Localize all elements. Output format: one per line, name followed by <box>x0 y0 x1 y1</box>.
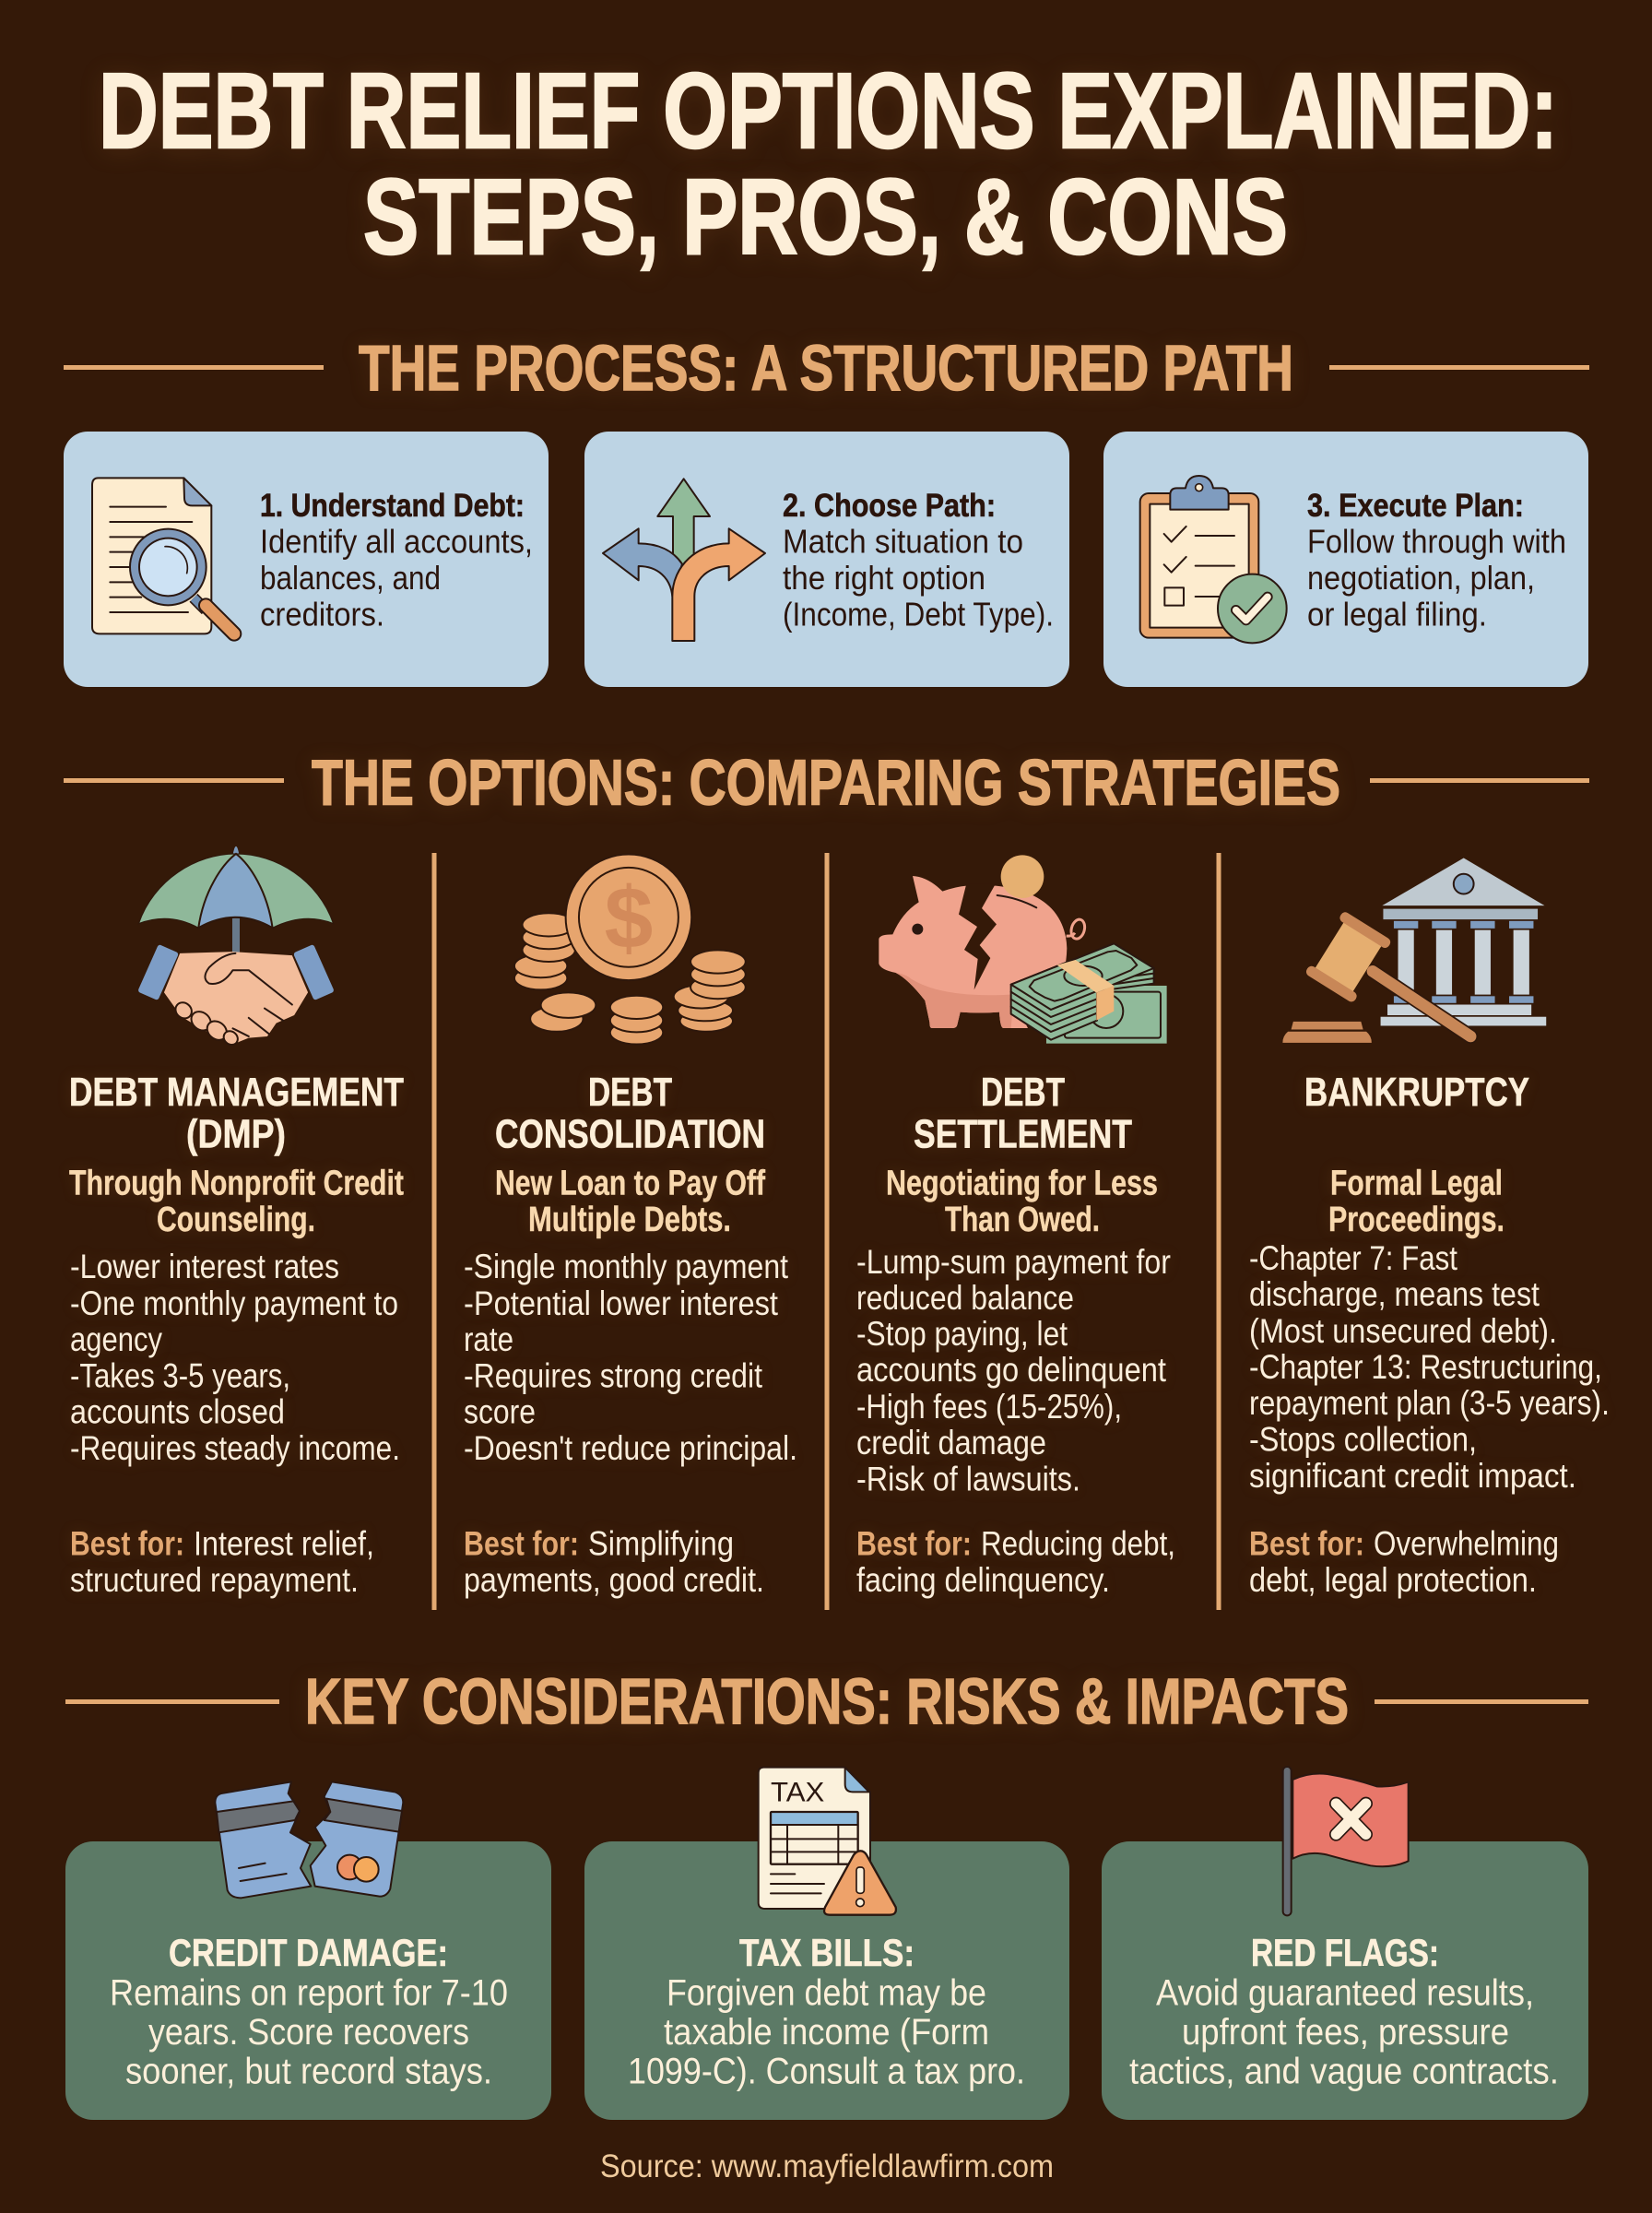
debt management best for: Interest relief, <box>194 1525 374 1562</box>
debt settlement title: SETTLEMENT <box>914 1112 1132 1156</box>
bankruptcy subtitle: Formal Legal <box>1330 1164 1503 1202</box>
debt management bullets: agency <box>70 1320 162 1358</box>
icon: broken credit card <box>215 1781 403 1898</box>
debt settlement bullets: reduced balance <box>856 1279 1074 1317</box>
debt management title: (DMP) <box>186 1112 286 1156</box>
icon: red flag <box>1283 1767 1409 1915</box>
step 3 text: negotiation, plan, <box>1307 559 1535 597</box>
tax bills text: 1099-C). Consult a tax pro. <box>628 2051 1025 2091</box>
debt consolidation bullets: -Doesn't reduce principal. <box>464 1429 797 1467</box>
debt settlement bullets: credit damage <box>856 1424 1046 1462</box>
step 2 text: the right option <box>783 559 985 597</box>
debt settlement bullets <box>856 1243 1171 1497</box>
debt settlement best for <box>856 1525 1175 1599</box>
red flags text: Avoid guaranteed results, <box>1156 1973 1534 2014</box>
panel: credit damage <box>65 1781 551 2120</box>
debt consolidation bullets <box>464 1248 797 1467</box>
panel: debt management <box>69 846 404 1599</box>
debt management bullets: -Requires steady income. <box>70 1429 400 1467</box>
bankruptcy bullets: (Most unsecured debt). <box>1249 1312 1557 1350</box>
debt management bullets: -Takes 3-5 years, <box>70 1357 290 1394</box>
red flags text: tactics, and vague contracts. <box>1129 2051 1559 2091</box>
step 1 text: creditors. <box>260 596 384 633</box>
bankruptcy bullets: discharge, means test <box>1249 1275 1540 1313</box>
debt consolidation best for: Best for: <box>464 1525 579 1562</box>
panel: bankruptcy <box>1249 858 1610 1599</box>
debt consolidation best for: payments, good credit. <box>464 1561 764 1599</box>
debt settlement subtitle <box>886 1164 1158 1239</box>
step 3 text: 3. Execute Plan: <box>1307 488 1524 524</box>
bankruptcy bullets: -Chapter 13: Restructuring, <box>1249 1348 1602 1386</box>
credit damage text: CREDIT DAMAGE: <box>169 1931 448 1974</box>
icon: broken piggy bank with cash <box>879 855 1167 1044</box>
debt consolidation subtitle <box>495 1164 765 1239</box>
debt consolidation subtitle: New Loan to Pay Off <box>495 1164 765 1202</box>
step 1 text: balances, and <box>260 559 441 597</box>
step 2 text: 2. Choose Path: <box>783 488 996 524</box>
debt settlement title: DEBT <box>981 1070 1065 1115</box>
debt consolidation bullets: -Requires strong credit <box>464 1357 763 1394</box>
debt consolidation title: DEBT <box>588 1070 672 1115</box>
tax bills text: taxable income (Form <box>664 2012 989 2053</box>
step 3 text: Follow through with <box>1307 522 1566 561</box>
debt management subtitle <box>69 1164 404 1239</box>
column dividers <box>431 853 1221 1610</box>
icon: coin stacks <box>514 854 746 1045</box>
step 3 text <box>1307 488 1566 633</box>
panel: debt settlement <box>856 855 1175 1599</box>
title <box>99 51 1558 277</box>
debt management title: DEBT MANAGEMENT <box>69 1070 404 1115</box>
icon: clipboard checklist <box>1140 476 1287 643</box>
red flags text: upfront fees, pressure <box>1182 2012 1509 2053</box>
debt consolidation bullets: -Single monthly payment <box>464 1248 789 1285</box>
debt settlement title <box>914 1070 1132 1156</box>
bankruptcy title: BANKRUPTCY <box>1304 1070 1529 1115</box>
debt management bullets: -One monthly payment to <box>70 1284 398 1322</box>
bankruptcy bullets <box>1249 1239 1610 1495</box>
debt consolidation bullets: score <box>464 1392 536 1431</box>
panel: step 3 execute plan <box>1103 432 1588 687</box>
bankruptcy bullets: -Stops collection, <box>1249 1420 1477 1459</box>
debt management bullets <box>70 1248 400 1467</box>
credit damage text: years. Score recovers <box>148 2012 469 2053</box>
bankruptcy subtitle: Proceedings. <box>1328 1201 1504 1239</box>
debt consolidation best for <box>464 1525 764 1599</box>
bankruptcy best for: Overwhelming <box>1374 1525 1559 1562</box>
credit damage text <box>110 1931 508 2091</box>
panel: step 2 choose path <box>584 432 1069 687</box>
debt settlement bullets: -Lump-sum payment for <box>856 1243 1171 1281</box>
step 1 text: 1. Understand Debt: <box>260 488 525 524</box>
icon: document with magnifier <box>92 478 234 633</box>
step 1 text: Identify all accounts, <box>260 522 533 561</box>
debt settlement bullets: -Risk of lawsuits. <box>856 1461 1080 1497</box>
debt consolidation subtitle: Multiple Debts. <box>528 1201 731 1239</box>
credit damage text: Remains on report for 7-10 <box>110 1973 508 2014</box>
step 2 text <box>783 488 1054 633</box>
debt management title <box>69 1070 404 1156</box>
debt consolidation title <box>495 1070 765 1156</box>
panel: red flags <box>1102 1767 1588 2120</box>
step 1 text <box>260 488 533 633</box>
debt management best for <box>70 1525 374 1599</box>
debt management best for: Best for: <box>70 1525 184 1562</box>
debt settlement best for: Best for: <box>856 1525 972 1562</box>
step 2 text: (Income, Debt Type). <box>783 596 1054 633</box>
title: STEPS, PROS, & CONS <box>363 157 1288 277</box>
section heading: key considerations: KEY CONSIDERATIONS: RISKS & IMPACTS <box>305 1665 1349 1737</box>
bankruptcy subtitle <box>1328 1164 1504 1239</box>
section heading: the process: THE PROCESS: A STRUCTURED PATH <box>359 332 1293 404</box>
tax bills text: TAX BILLS: <box>739 1931 914 1974</box>
step 3 text: or legal filing. <box>1307 596 1487 633</box>
icon: courthouse and gavel <box>1282 858 1546 1043</box>
debt management subtitle: Through Nonprofit Credit <box>69 1164 404 1202</box>
icon: umbrella over handshake <box>137 846 335 1047</box>
icon: coin stacks: $ <box>605 870 653 967</box>
panel: tax bills <box>584 1768 1069 2120</box>
debt settlement subtitle: Than Owed. <box>945 1201 1100 1239</box>
debt settlement subtitle: Negotiating for Less <box>886 1164 1158 1202</box>
debt settlement bullets: -Stop paying, let <box>856 1315 1068 1353</box>
tax bills text <box>628 1931 1025 2091</box>
red flags text: RED FLAGS: <box>1251 1931 1439 1974</box>
debt consolidation bullets: -Potential lower interest <box>464 1284 779 1322</box>
debt settlement bullets: accounts go delinquent <box>856 1351 1167 1389</box>
debt settlement best for: Reducing debt, <box>981 1525 1175 1562</box>
debt management bullets: -Lower interest rates <box>70 1248 339 1285</box>
bankruptcy best for: debt, legal protection. <box>1249 1561 1537 1599</box>
panel: debt consolidation <box>464 854 797 1599</box>
debt management bullets: accounts closed <box>70 1392 285 1431</box>
debt consolidation title: CONSOLIDATION <box>495 1112 765 1156</box>
tax bills text: Forgiven debt may be <box>667 1973 986 2014</box>
bankruptcy bullets: significant credit impact. <box>1249 1457 1576 1495</box>
debt consolidation best for: Simplifying <box>588 1525 734 1562</box>
debt settlement bullets: -High fees (15-25%), <box>856 1388 1122 1426</box>
debt consolidation bullets: rate <box>464 1320 513 1358</box>
section heading: the options: THE OPTIONS: COMPARING STRATEGIES <box>312 747 1340 819</box>
bankruptcy best for: Best for: <box>1249 1525 1364 1562</box>
debt management subtitle: Counseling. <box>157 1201 315 1239</box>
debt management best for: structured repayment. <box>70 1561 359 1599</box>
step 2 text: Match situation to <box>783 522 1023 561</box>
bankruptcy bullets: -Chapter 7: Fast <box>1249 1239 1458 1277</box>
panel: step 1 understand debt <box>64 432 549 687</box>
icon: branching arrows <box>603 479 765 641</box>
debt settlement best for: facing delinquency. <box>856 1561 1110 1599</box>
credit damage text: sooner, but record stays. <box>125 2051 492 2091</box>
icon: tax form with warning: TAX <box>771 1777 824 1807</box>
icon: tax form with warning <box>759 1768 896 1915</box>
bankruptcy best for <box>1249 1525 1559 1599</box>
source line: Source: www.mayfieldlawfirm.com <box>600 2148 1054 2184</box>
red flags text <box>1129 1931 1559 2091</box>
